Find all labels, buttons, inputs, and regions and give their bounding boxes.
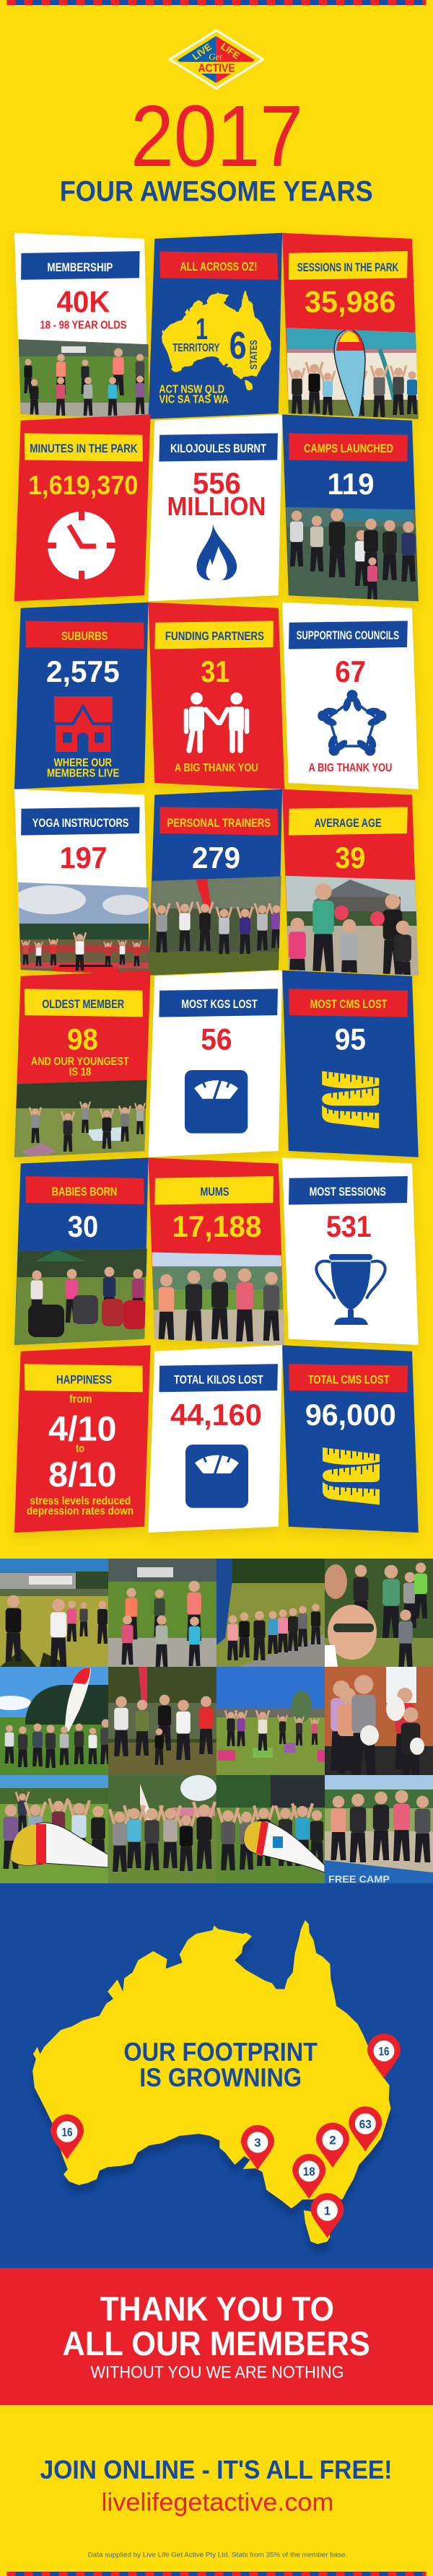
panel: suburbs — [14, 603, 149, 789]
panel: oldest member: IS 18 — [69, 1066, 92, 1078]
panel: happiness: depression rates down — [27, 1505, 134, 1517]
map pin: ACT 2 — [316, 2123, 349, 2168]
website address: livelifegetactive.com — [101, 2488, 333, 2516]
icon: house — [54, 696, 113, 752]
panel: most cms lost: MOST CMS LOST — [310, 998, 387, 1011]
panel: total cms lost: 96,000 — [305, 1398, 396, 1432]
map: Australia small: STATES — [248, 340, 259, 369]
photo: close-up group against brick wall — [325, 1667, 433, 1775]
panel: total cms lost — [282, 1345, 419, 1533]
photo: seated boxing group — [108, 1559, 216, 1667]
photo: group behind Medibank banner — [0, 1775, 108, 1883]
photo: yoga on green grass — [216, 1667, 325, 1775]
panel: suburbs: MEMBERS LIVE — [47, 767, 119, 779]
icon: flame — [196, 524, 237, 580]
panel: camps launched — [282, 414, 419, 602]
stat cards grid — [14, 233, 419, 1533]
title: 2017: 2017 — [131, 87, 303, 185]
panel: babies born — [14, 1157, 149, 1346]
panel: babies born: BABIES BORN — [52, 1186, 117, 1199]
photo: camp group on tennis court — [286, 507, 419, 602]
panel: total kilos lost: TOTAL KILOS LOST — [174, 1374, 263, 1387]
photo: members with boxing gloves — [18, 339, 151, 420]
map pin: South Australia 3: 3 — [254, 2136, 261, 2150]
heading: our footprint is growing: OUR FOOTPRINT — [123, 2037, 318, 2067]
panel: most sessions: MOST SESSIONS — [310, 1186, 386, 1199]
panel: suburbs: SUBURBS — [61, 630, 108, 643]
panel: thank you: WITHOUT YOU WE ARE NOTHING — [91, 2363, 344, 2383]
call to action: join online: JOIN ONLINE - IT'S ALL FREE! — [40, 2455, 393, 2484]
panel: thank you — [0, 2268, 433, 2405]
photo: outdoor yoga group — [14, 1079, 148, 1159]
map pin: Western Australia 16 — [51, 2114, 84, 2160]
heading: our footprint is growing — [123, 2037, 318, 2093]
panel: sessions in the park: 35,986 — [305, 285, 395, 319]
panel: mums — [149, 1157, 286, 1346]
panel: kilojoules burnt: 556 — [193, 466, 241, 500]
panel: supporting councils — [282, 603, 419, 789]
map: Australia small — [162, 291, 271, 390]
panel: most kgs lost: 56 — [201, 1022, 232, 1056]
panel: yoga instructors — [14, 789, 150, 977]
logo: Live Life Get Active diamond: LIVE — [191, 41, 214, 62]
photo: cheering group under trees — [108, 1775, 216, 1883]
panel: yoga instructors: 197 — [60, 841, 107, 875]
photo: selfie crowd — [325, 1559, 433, 1667]
map pin: Victoria 18: 18 — [303, 2165, 315, 2178]
panel: funding partners: 31 — [201, 654, 229, 688]
map pin: ACT 2: 2 — [329, 2134, 336, 2147]
panel: mums: MUMS — [201, 1186, 229, 1199]
photo: group by park steps — [216, 1559, 325, 1667]
panel: all across Oz: ACT NSW QLD — [159, 384, 224, 396]
panel: happiness: stress levels reduced — [30, 1495, 131, 1507]
panel: personal trainers: 279 — [192, 841, 240, 875]
panel: most sessions — [282, 1157, 419, 1345]
panel: minutes in the park — [14, 414, 151, 601]
panel: most cms lost — [282, 971, 419, 1157]
panel: camps launched: 119 — [328, 467, 374, 501]
panel: average age: 39 — [335, 841, 365, 875]
panel: yoga instructors: YOGA INSTRUCTORS — [32, 817, 128, 830]
photo: group with gloves under trees — [108, 1667, 216, 1775]
panel: our footprint — [0, 1883, 433, 2268]
photo: group with feather banner by the sea — [0, 1667, 108, 1775]
panel: all across Oz — [149, 233, 282, 419]
photo: group behind WentWest banner — [216, 1775, 325, 1883]
map pin: South Australia 3 — [241, 2125, 274, 2170]
icon: bathroom scale — [185, 1070, 248, 1134]
panel: suburbs: WHERE OUR — [54, 757, 112, 769]
panel: most kgs lost: MOST KGS LOST — [181, 998, 258, 1011]
panel: total cms lost: TOTAL CMS LOST — [308, 1374, 390, 1387]
photo: mass yoga session — [14, 882, 150, 977]
map pin: Tasmania 1 — [310, 2193, 344, 2238]
map pin: New South Wales 63 — [349, 2106, 382, 2152]
panel: supporting councils: A BIG THANK YOU — [309, 762, 392, 774]
panel: sessions in the park: SESSIONS IN THE PARK — [297, 261, 398, 274]
photo: mums with prams — [14, 1248, 148, 1346]
photo: mums and babies with blue banner — [325, 1775, 433, 1885]
panel: happiness: HAPPINESS — [56, 1374, 112, 1387]
logo: Live Life Get Active diamond: LIFE — [219, 40, 242, 61]
icon: circle of people — [318, 690, 387, 756]
footnote: data source: Data supplied by Live Life Get Active Pty Ltd. Stats from 35% of the member base. — [88, 2551, 347, 2559]
icon: bathroom scale — [185, 1445, 248, 1508]
panel: all across Oz: ALL ACROSS OZ! — [180, 260, 257, 273]
icon: tape measure — [323, 1447, 380, 1505]
map: Australia small: 6 — [229, 324, 247, 367]
panel: thank you: ALL OUR MEMBERS — [62, 2324, 370, 2362]
panel: kilojoules burnt: MILLION — [167, 491, 266, 521]
panel: most cms lost: 95 — [335, 1022, 366, 1056]
map pin: Western Australia 16: 16 — [62, 2125, 72, 2139]
panel: average age: AVERAGE AGE — [315, 817, 381, 830]
panel: total kilos lost — [149, 1345, 282, 1533]
panel: average age — [282, 789, 419, 994]
icon: tape measure — [322, 1071, 379, 1129]
panel: happiness — [14, 1345, 151, 1533]
panel: funding partners: FUNDING PARTNERS — [165, 630, 264, 643]
panel: supporting councils: 67 — [335, 654, 366, 688]
panel: happiness: to — [76, 1443, 84, 1455]
panel: sessions in the park — [282, 233, 419, 420]
panel: personal trainers: PERSONAL TRAINERS — [167, 817, 271, 830]
panel: oldest member — [14, 971, 151, 1159]
photo: mums and babies with blue banner: FREE CAMP — [328, 1873, 390, 1885]
logo: Live Life Get Active diamond: Get — [209, 51, 222, 62]
photo: mums holding babies — [152, 1252, 286, 1346]
map: Australia small: TERRITORY — [172, 342, 220, 354]
panel: oldest member: 98 — [67, 1022, 98, 1056]
icon: two people shaking hands — [186, 693, 247, 750]
panel: membership: 18 - 98 YEAR OLDS — [40, 319, 127, 332]
map: Australia small: 1 — [196, 312, 208, 346]
panel: kilojoules burnt: KILOJOULES BURNT — [170, 442, 266, 455]
panel: most sessions: 531 — [326, 1209, 372, 1243]
panel: funding partners: A BIG THANK YOU — [175, 762, 258, 774]
panel: membership: MEMBERSHIP — [47, 261, 113, 274]
icon: trophy — [316, 1254, 385, 1325]
map pin: Queensland 16 — [367, 2033, 401, 2079]
panel: most kgs lost — [149, 971, 282, 1157]
panel: all across Oz: VIC SA TAS WA — [159, 394, 229, 406]
panel: babies born: 30 — [68, 1209, 98, 1243]
photo: boxing pair on lawn — [0, 1559, 108, 1667]
panel: personal trainers — [148, 789, 284, 976]
panel: funding partners — [149, 603, 284, 789]
panel: oldest member: AND OUR YOUNGEST — [31, 1056, 129, 1068]
photo grid: twelve group photos — [0, 1559, 433, 1885]
panel: happiness: 4/10 — [48, 1411, 117, 1449]
panel: suburbs: 2,575 — [46, 654, 120, 688]
panel: camps launched: CAMPS LAUNCHED — [304, 442, 393, 455]
panel: minutes in the park: 1,619,370 — [28, 470, 138, 500]
photo: personal trainers flexing — [148, 876, 284, 976]
logo: Live Life Get Active diamond: ACTIVE — [198, 62, 235, 74]
map pin: Tasmania 1: 1 — [324, 2204, 331, 2217]
panel: minutes in the park: MINUTES IN THE PARK — [30, 442, 138, 455]
map pin: Queensland 16: 16 — [379, 2044, 389, 2058]
panel: thank you: THANK YOU TO — [100, 2290, 334, 2328]
panel: total kilos lost: 44,160 — [170, 1398, 262, 1432]
heading: four awesome years: FOUR AWESOME YEARS — [60, 175, 373, 207]
panel: membership — [14, 233, 151, 420]
panel: membership: 40K — [56, 285, 110, 319]
heading: our footprint is growing: IS GROWNING — [139, 2063, 302, 2093]
photo: group with banner at park — [286, 328, 419, 420]
photo: members with boxing gloves by house — [286, 876, 419, 976]
panel: mums: 17,188 — [172, 1209, 261, 1243]
panel: kilojoules burnt — [149, 414, 282, 601]
map pin: Victoria 18 — [292, 2154, 325, 2199]
map: Australia large with shadow — [32, 1920, 391, 2253]
map pin: New South Wales 63: 63 — [359, 2117, 372, 2131]
panel: happiness: from — [69, 1393, 92, 1406]
icon: clock — [48, 512, 115, 579]
panel: happiness: 8/10 — [48, 1456, 117, 1494]
logo: Live Life Get Active diamond — [170, 30, 263, 89]
panel: oldest member: OLDEST MEMBER — [42, 998, 124, 1011]
